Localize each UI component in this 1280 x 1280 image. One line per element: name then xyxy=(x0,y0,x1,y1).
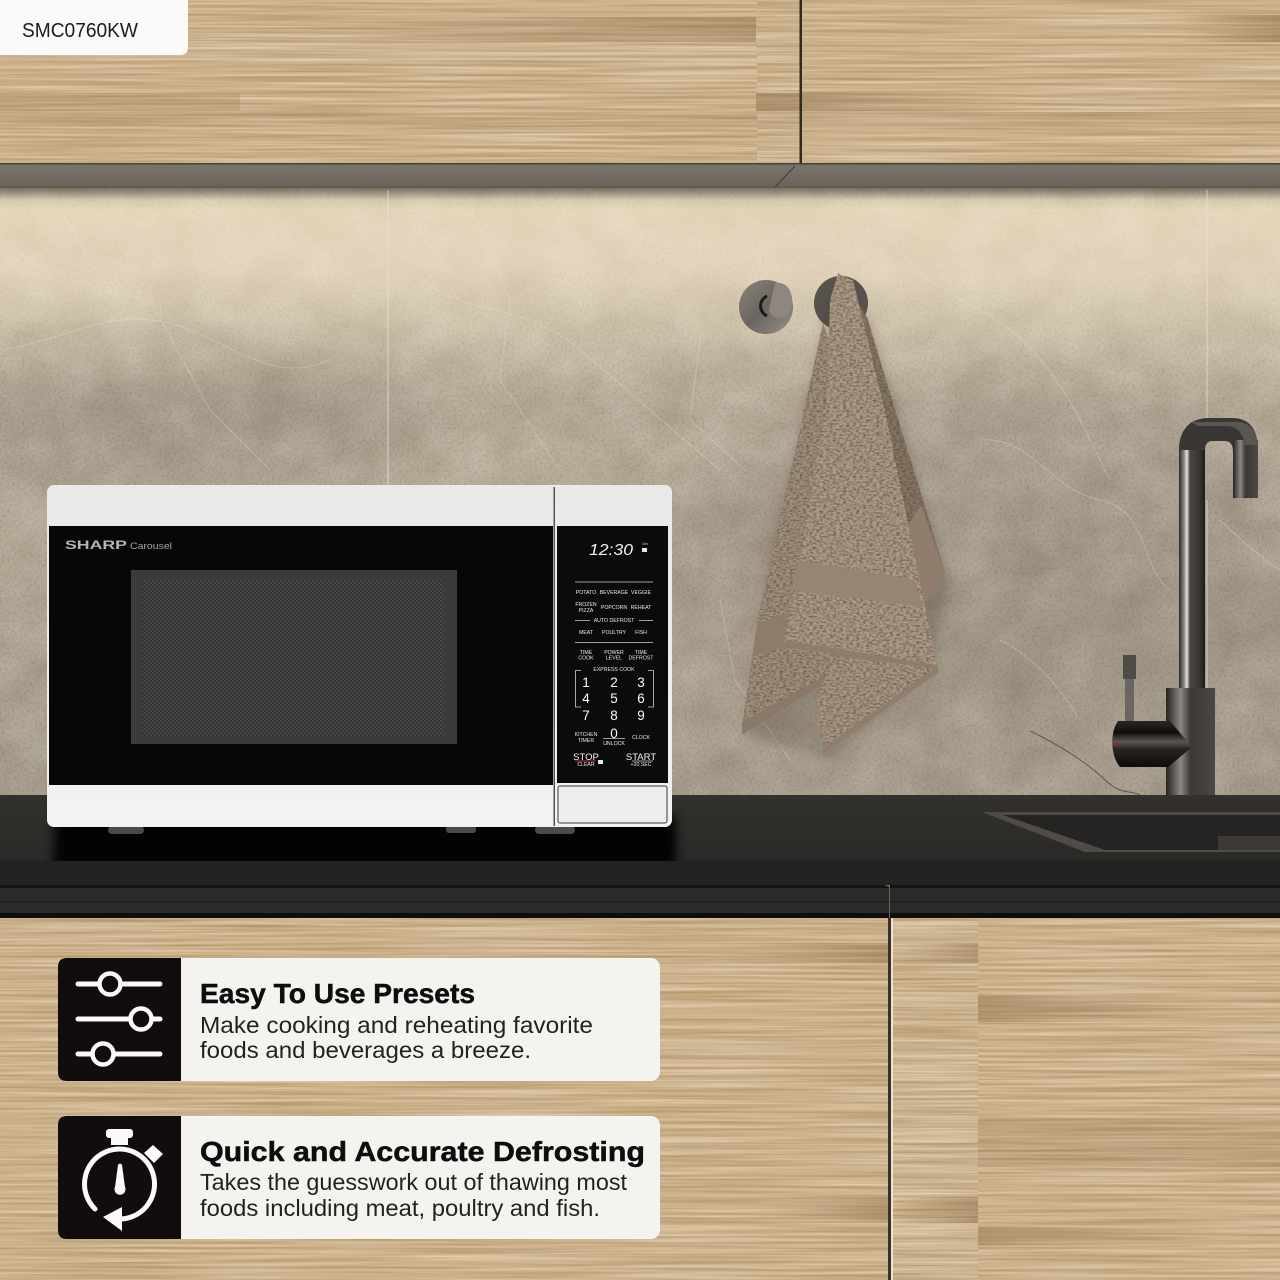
preset labels: TIMER xyxy=(578,738,594,744)
feet xyxy=(108,826,575,834)
hook right xyxy=(814,276,868,330)
display: On xyxy=(642,541,648,546)
model label xyxy=(0,0,188,55)
icon: sliders xyxy=(58,958,181,1081)
description: Takes the guesswork out of thawing most xyxy=(200,1169,628,1195)
preset labels: POPCORN xyxy=(601,605,627,611)
stop and start: STOP xyxy=(573,752,599,763)
upper wood cabinets xyxy=(0,0,1280,165)
heading: Quick and Accurate Defrosting xyxy=(200,1136,645,1167)
hanging towel xyxy=(742,272,945,754)
preset labels: FISH xyxy=(635,630,647,636)
preset labels: PIZZA xyxy=(579,608,594,614)
preset labels: FROZEN xyxy=(575,602,597,608)
number keypad: 8 xyxy=(610,708,618,723)
description xyxy=(200,1012,593,1063)
description xyxy=(200,1169,628,1221)
under-cabinet band xyxy=(0,163,1280,189)
preset labels: AUTO DEFROST xyxy=(594,618,635,624)
number keypad: 5 xyxy=(610,691,618,706)
preset labels: KITCHEN xyxy=(575,732,598,738)
preset labels: REHEAT xyxy=(631,605,652,611)
description: foods including meat, poultry and fish. xyxy=(200,1195,600,1221)
number keypad: 3 xyxy=(637,675,645,690)
feature card: presets xyxy=(58,958,660,1081)
number keypad: 0 xyxy=(610,726,618,741)
door divider xyxy=(554,487,555,826)
faucet xyxy=(1112,418,1258,804)
description: Make cooking and reheating favorite xyxy=(200,1012,593,1038)
towel lower flap xyxy=(817,657,939,754)
model label: SMC0760KW xyxy=(22,20,138,42)
logo xyxy=(65,540,172,552)
preset labels xyxy=(575,590,654,768)
number keypad: 7 xyxy=(582,708,590,723)
display: 12:30 xyxy=(589,542,633,559)
feature card: defrosting xyxy=(58,1116,660,1239)
wall hooks xyxy=(739,276,868,334)
stone backsplash xyxy=(0,188,1280,798)
preset labels: CLOCK xyxy=(632,735,650,741)
sink xyxy=(982,812,1280,852)
number keypad xyxy=(582,675,645,741)
preset labels: VEGGIE xyxy=(631,590,651,596)
lock icon xyxy=(598,760,603,764)
microwave body xyxy=(47,485,672,827)
logo: Carousel xyxy=(130,541,172,551)
logo: SHARP xyxy=(65,540,127,552)
number keypad: 1 xyxy=(582,675,590,690)
preset labels: POTATO xyxy=(576,590,596,596)
preset labels: EXPRESS COOK xyxy=(593,667,635,673)
stop and start xyxy=(573,752,656,763)
faucet lever xyxy=(1112,655,1192,767)
preset labels: +30 SEC xyxy=(631,762,652,768)
number keypad: 4 xyxy=(582,691,590,706)
faucet body xyxy=(1163,688,1217,804)
preset labels: DEFROST xyxy=(629,656,654,662)
lower wood cabinets xyxy=(0,918,1280,1280)
control panel xyxy=(557,526,668,783)
door window panel xyxy=(49,526,553,785)
stop and start: START xyxy=(626,752,656,763)
towel shadow xyxy=(745,290,950,760)
description: foods and beverages a breeze. xyxy=(200,1037,531,1063)
preset labels: LEVEL xyxy=(606,656,622,662)
door release button xyxy=(558,786,667,823)
preset labels: POULTRY xyxy=(602,630,627,636)
number keypad: 9 xyxy=(637,708,645,723)
countertop xyxy=(0,795,1280,919)
preset labels: POWER xyxy=(604,650,624,656)
number keypad: 2 xyxy=(610,675,618,690)
number keypad: 6 xyxy=(637,691,645,706)
heading: Easy To Use Presets xyxy=(200,978,475,1009)
hook left xyxy=(739,280,793,334)
preset labels: BEVERAGE xyxy=(600,590,629,596)
towel back layer xyxy=(742,272,945,735)
faucet spout xyxy=(1179,418,1258,690)
shadow under microwave xyxy=(54,815,676,875)
preset labels: TIME xyxy=(580,650,593,656)
towel front fold xyxy=(785,274,937,669)
icon: stopwatch xyxy=(58,1116,181,1239)
preset labels: UNLOCK xyxy=(603,741,625,747)
preset labels: COOK xyxy=(578,656,594,662)
preset labels: TIME xyxy=(635,650,648,656)
display xyxy=(589,541,648,559)
microwave xyxy=(47,485,672,834)
preset labels: CLEAR xyxy=(577,762,595,768)
preset labels: MEAT xyxy=(579,630,594,636)
